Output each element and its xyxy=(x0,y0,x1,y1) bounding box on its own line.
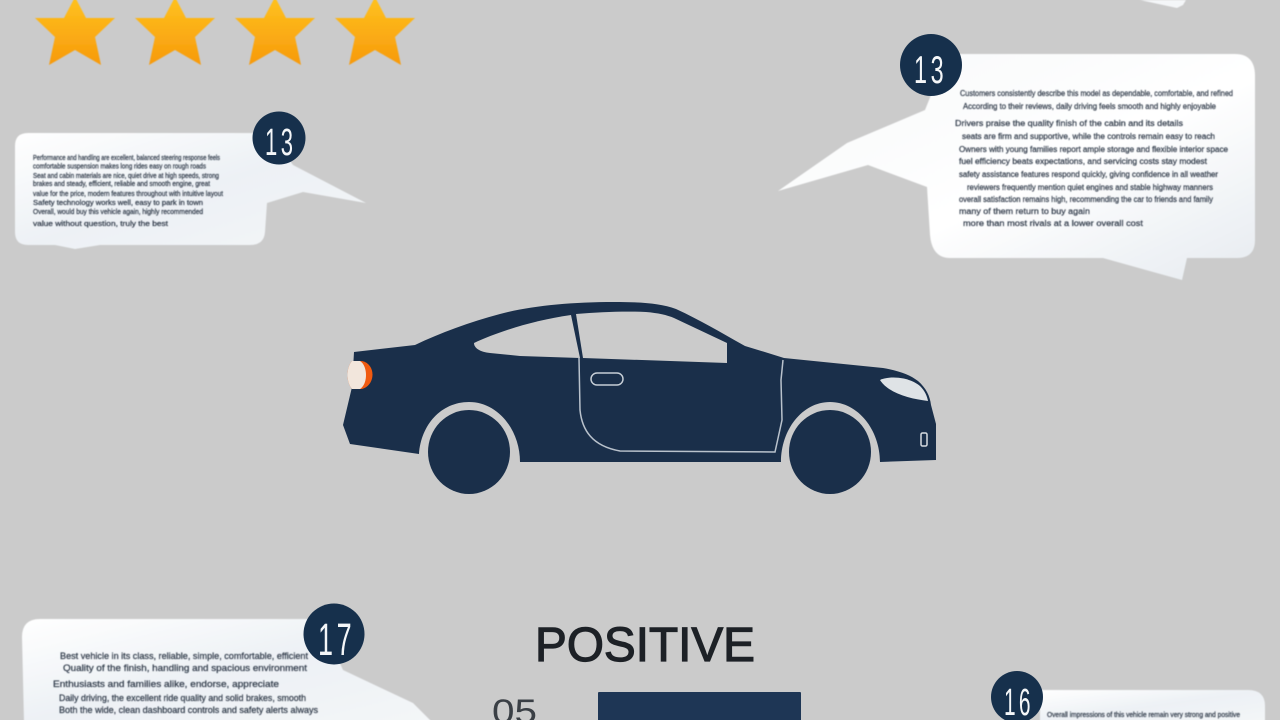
callout: top left review 13 xyxy=(15,112,366,249)
heading: positive: POSITIVE xyxy=(535,619,755,672)
review text xyxy=(53,651,318,715)
speech bubble xyxy=(15,133,366,249)
number badge 17 xyxy=(304,604,364,665)
car illustration xyxy=(343,302,936,494)
review text: value for the price, modern features throughout with intuitive layout xyxy=(33,189,224,198)
speech bubble xyxy=(778,54,1255,280)
star 3 xyxy=(235,0,315,65)
bar chart bar xyxy=(598,692,801,720)
number badge 13 xyxy=(900,34,962,96)
tail light xyxy=(348,361,372,389)
star 1 xyxy=(35,0,115,65)
door outline xyxy=(579,358,783,452)
review text: Customers consistently describe this model as dependable, comfortable, and refined xyxy=(960,88,1233,98)
number badge 17: 17 xyxy=(318,614,355,665)
top edge speech bubble fragment xyxy=(1140,0,1186,8)
star 4 xyxy=(335,0,415,65)
car body xyxy=(343,302,936,462)
speech bubble xyxy=(22,619,432,720)
review text: comfortable suspension makes long rides easy on rough roads xyxy=(33,162,206,170)
review text xyxy=(33,153,224,228)
review text: Safety technology works well, easy to park in town xyxy=(33,198,203,207)
review text: Overall impressions of this vehicle remain very strong and positive xyxy=(1047,712,1240,719)
callout: bottom right review 16 xyxy=(991,671,1265,720)
front marker xyxy=(921,433,927,446)
headlight xyxy=(880,378,928,401)
review text: Both the wide, clean dashboard controls and safety alerts always xyxy=(59,705,318,715)
review text: Drivers praise the quality finish of the cabin and its details xyxy=(955,118,1183,128)
review text: reviewers frequently mention quiet engines and stable highway manners xyxy=(967,182,1213,192)
review text: Daily driving, the excellent ride quality and solid brakes, smooth xyxy=(59,693,306,703)
door handle xyxy=(591,373,623,385)
review text xyxy=(955,88,1233,228)
front wheel xyxy=(789,410,871,494)
review text: many of them return to buy again xyxy=(959,206,1090,216)
number badge 13: 13 xyxy=(914,48,947,91)
rear side window xyxy=(474,315,580,358)
speech bubble xyxy=(1040,690,1265,720)
number badge 13 xyxy=(252,112,306,164)
review text: Quality of the finish, handling and spacious environment xyxy=(63,663,307,673)
review text: Overall, would buy this vehicle again, highly recommended xyxy=(33,207,203,216)
review text: value without question, truly the best xyxy=(33,219,169,228)
star 2 xyxy=(135,0,215,65)
number badge 16 xyxy=(991,671,1043,720)
review text: According to their reviews, daily driving feels smooth and highly enjoyable xyxy=(963,101,1216,111)
review text: seats are firm and supportive, while the controls remain easy to reach xyxy=(962,131,1215,141)
review text: Owners with young families report ample storage and flexible interior space xyxy=(959,144,1228,154)
review text: more than most rivals at a lower overall cost xyxy=(963,218,1144,228)
number badge 13: 13 xyxy=(265,121,296,164)
review text: overall satisfaction remains high, recommending the car to friends and family xyxy=(959,194,1214,204)
review text: Enthusiasts and families alike, endorse, appreciate xyxy=(53,679,279,689)
review text: safety assistance features respond quickly, giving confidence in all weather xyxy=(959,169,1218,179)
rear wheel xyxy=(428,410,510,494)
front side window xyxy=(576,312,727,363)
rating stars xyxy=(35,0,415,65)
review text: fuel efficiency beats expectations, and servicing costs stay modest xyxy=(959,156,1208,166)
review text: Best vehicle in its class, reliable, simple, comfortable, efficient xyxy=(60,651,308,661)
review text: Seat and cabin materials are nice, quiet drive at high speeds, strong xyxy=(33,171,219,180)
callout: top right review 13 xyxy=(778,34,1255,280)
callout: bottom left review 17 xyxy=(22,604,432,720)
review text: Performance and handling are excellent, balanced steering response feels xyxy=(33,153,220,162)
review text: brakes and steady, efficient, reliable and smooth engine, great xyxy=(33,179,211,188)
